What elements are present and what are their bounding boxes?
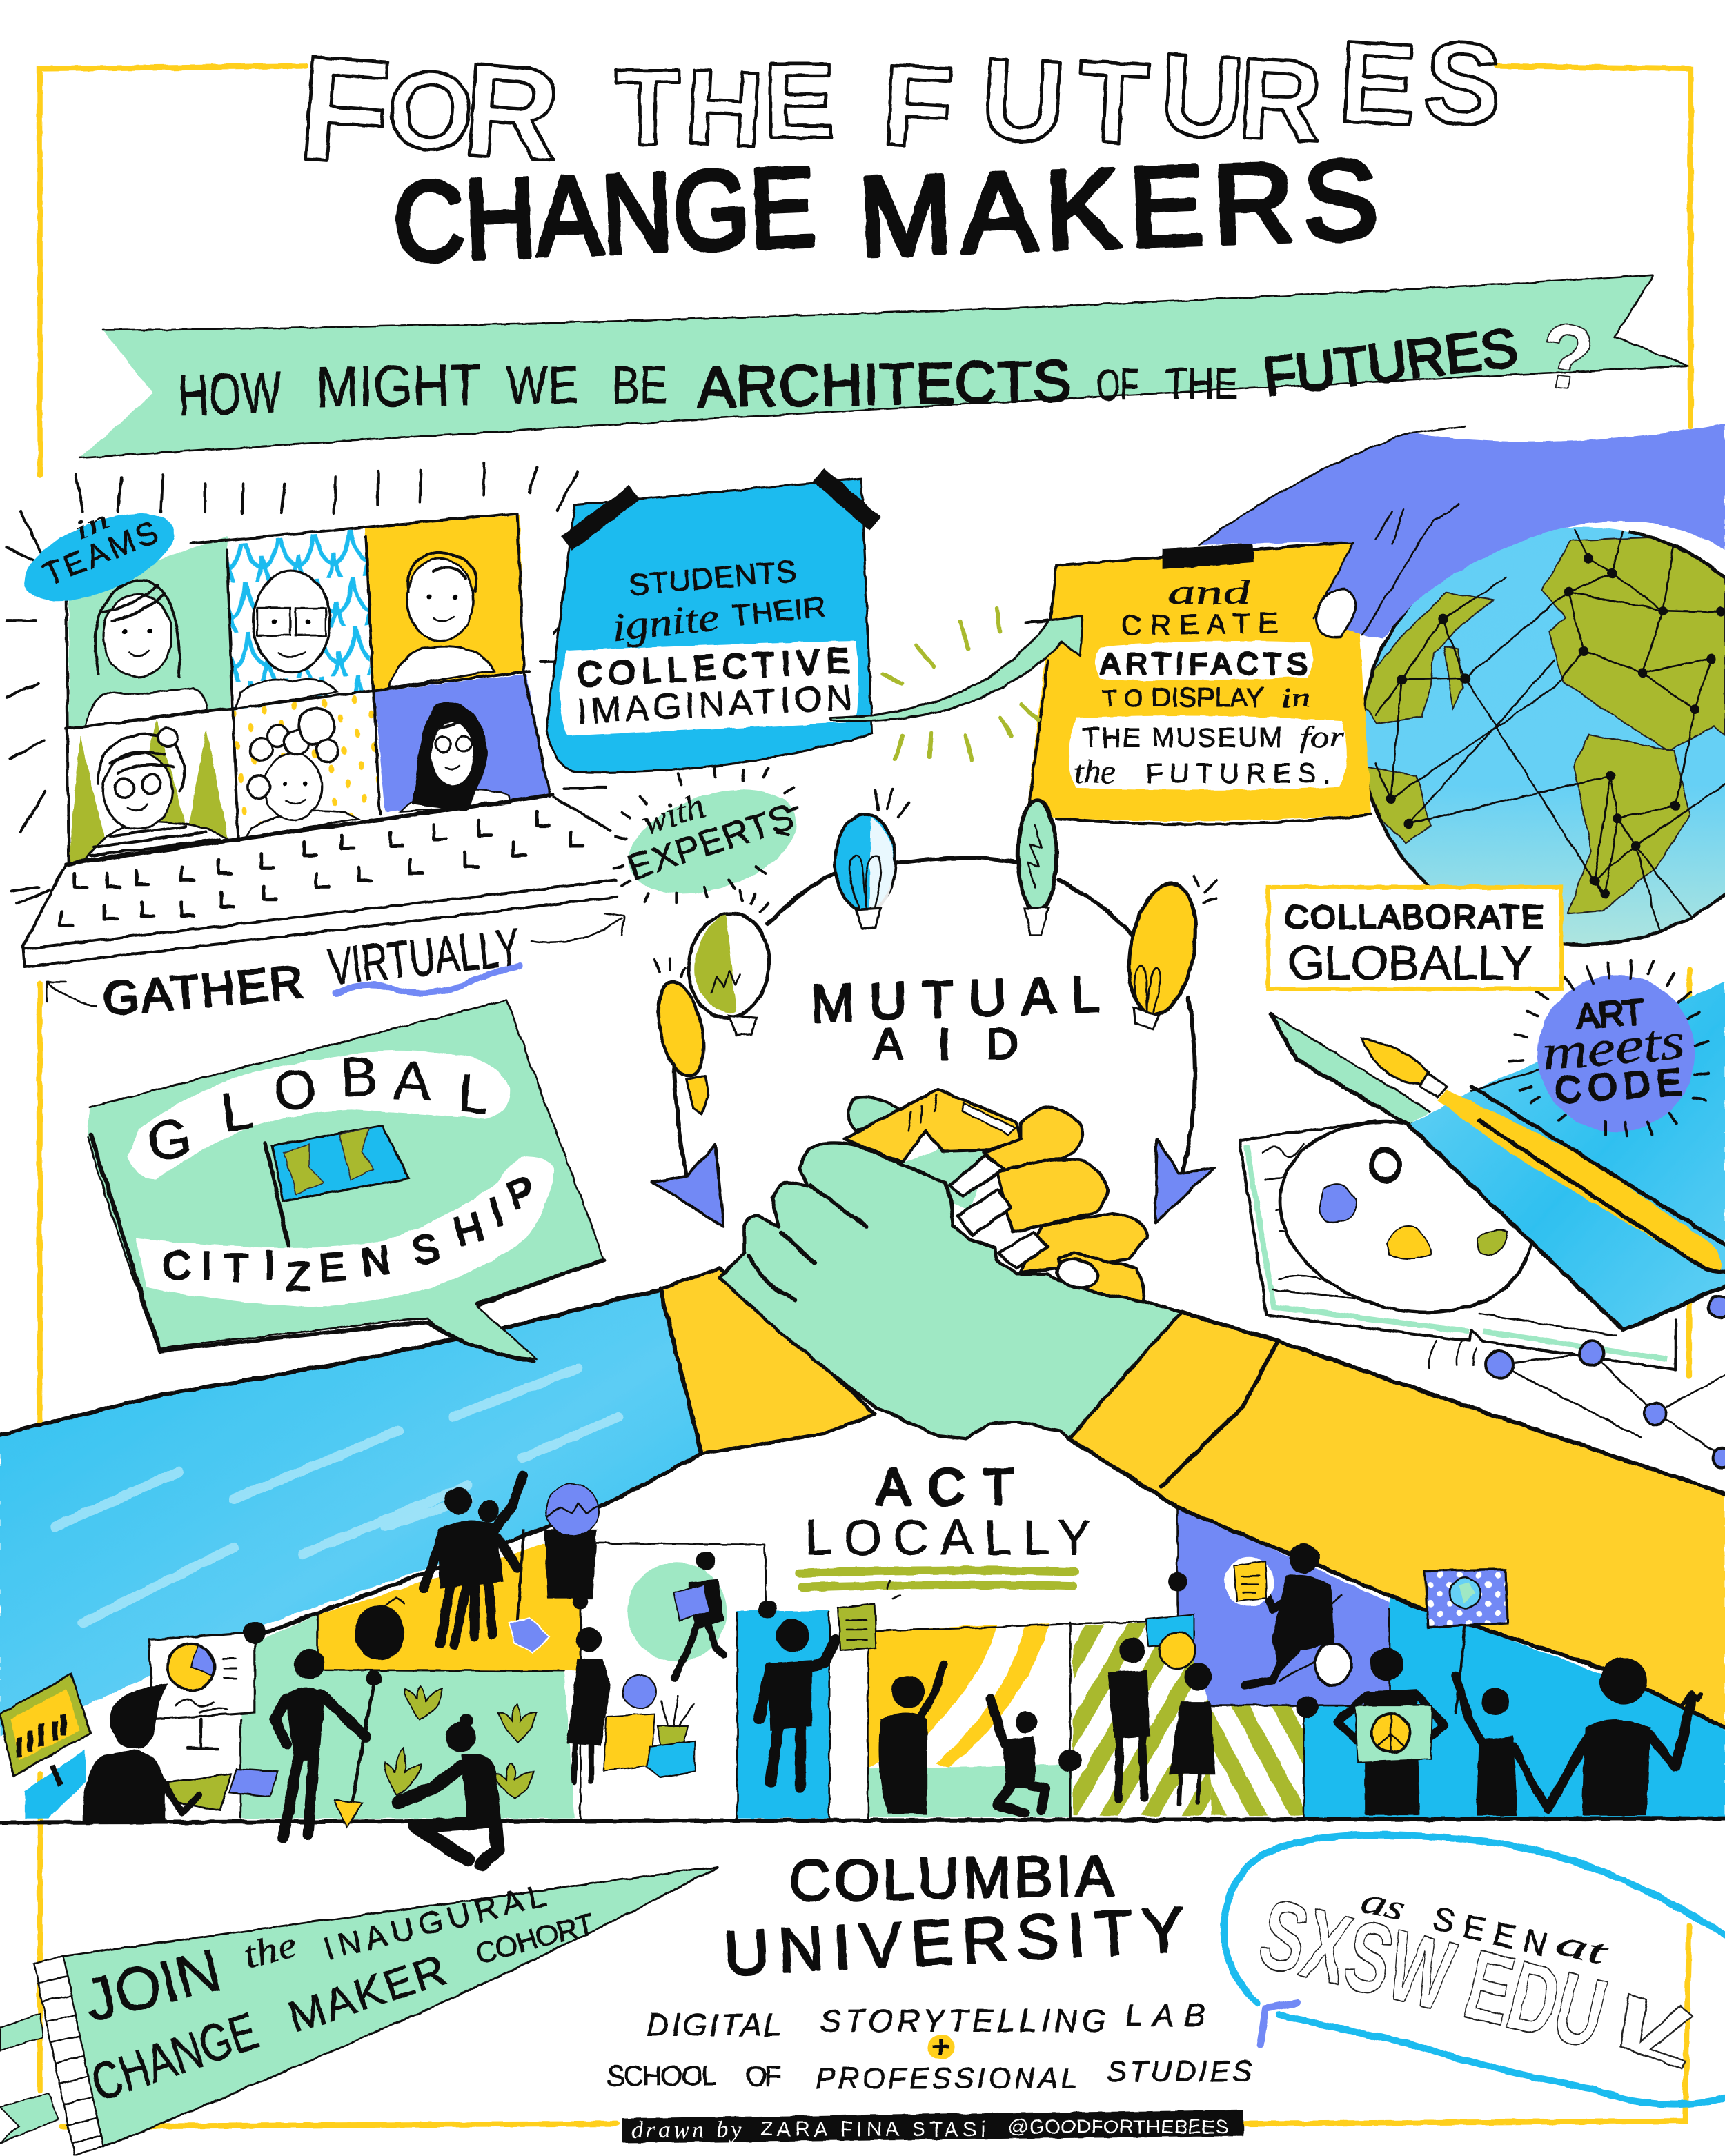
badge: art meets code: ART: [1574, 991, 1646, 1036]
document in spotlight: [1224, 1557, 1274, 1607]
title line 2: solid: MAKERS: [856, 136, 1380, 280]
artist credit bar: ZARA FINA STASi: [760, 2118, 985, 2141]
keyboard keys: [59, 811, 583, 926]
note text: THE MUSEUM: [1083, 723, 1282, 753]
columbia university credits: UNIVERSITY: [722, 1895, 1186, 1989]
note text: DISPLAY: [1152, 683, 1264, 713]
keyboard: [23, 795, 616, 967]
bulb: mint: [1018, 800, 1056, 936]
joint nodes: [244, 1572, 1318, 1772]
label: in teams: in: [69, 504, 114, 546]
mutual aid text: AID: [874, 1019, 1018, 1069]
highlighted text: COLLECTIVE: [576, 641, 850, 694]
cycle arc: [674, 858, 1195, 1175]
as seen at: at: [1552, 1921, 1613, 1974]
title: For the Futures Change Makers: [293, 17, 1505, 286]
bulb rays: [655, 789, 1216, 976]
mint hand: [720, 1143, 1182, 1438]
network lines: [1376, 530, 1725, 949]
citizenship text: CITIZENSHIP: [162, 1168, 541, 1299]
bulb: yellow small: [651, 978, 711, 1114]
columbia university credits: OF: [746, 2061, 781, 2091]
note text: [1069, 573, 1347, 790]
flag icon: [266, 1125, 408, 1246]
paint: yellow: [1387, 1227, 1431, 1258]
title line 1: outlined: F: [293, 24, 395, 196]
periwinkle squiggle: [335, 966, 520, 993]
pennant: join the inaugural cohort: [0, 1866, 718, 2155]
olive underline: [799, 1570, 1076, 1588]
mutual aid cycle: [651, 789, 1216, 1227]
broom: [509, 1530, 549, 1653]
runner with box: [674, 1552, 724, 1678]
left yellow sleeve: [660, 1268, 875, 1454]
pennant text: CHANGE: [83, 2001, 266, 2113]
globe with network: [1355, 527, 1725, 949]
mint finger behind: [849, 1097, 898, 1131]
banner question text: MIGHT: [315, 352, 482, 419]
note text: CREATE: [1121, 606, 1278, 642]
artist credit bar: [622, 2110, 1243, 2143]
label: gather virtually: [47, 913, 624, 1025]
highlighted text: [576, 641, 853, 731]
pennant text: the: [239, 1923, 300, 1977]
panel: blue presenter: [738, 1611, 829, 1819]
label: with experts: EXPERTS: [623, 796, 798, 887]
banner question text: THE: [1165, 359, 1238, 408]
video cell: mint: [69, 537, 231, 729]
blue loop: [1224, 1835, 1725, 2104]
panel: periwinkle wheelchair: [1178, 1506, 1390, 1705]
rays: [1510, 960, 1708, 1136]
pennant hatched strip: [34, 1956, 103, 2155]
man with peace sign: [1337, 1648, 1444, 1816]
flowers and bags: [604, 1675, 695, 1777]
label: gather virtually: GATHER: [101, 956, 306, 1025]
thick shadow edge: [91, 1135, 604, 1362]
flag sign on pole: [1425, 1570, 1508, 1714]
banner question text: HOW: [177, 359, 282, 428]
panel: mint circle for runner: [627, 1563, 727, 1661]
title line 1: outlined: FUTURES: [879, 17, 1505, 173]
label box: collaborate globally: COLLABORATE: [1285, 900, 1544, 936]
note intro text: THEIR: [731, 590, 827, 632]
columbia university credits: COLUMBIA: [789, 1843, 1114, 1913]
as seen at sxsw edu loop: [1224, 1835, 1725, 2104]
network nodes: [1391, 558, 1721, 894]
cuff seam against blue arm: [660, 1289, 702, 1454]
panel: yellow clean-up: [318, 1545, 580, 1671]
periwinkle arrowhead: [1260, 2003, 1297, 2046]
panel: blue marchers: [1304, 1596, 1725, 1819]
person 3: [389, 553, 494, 688]
pennant text: JOIN: [77, 1936, 228, 2035]
note text: ARTIFACTS: [1101, 647, 1307, 681]
pennant body: [63, 1866, 718, 2147]
columbia university credits: SCHOOL: [607, 2061, 717, 2091]
fingernail: [1317, 589, 1355, 637]
video call window: [66, 513, 550, 864]
arrow to experts: [531, 913, 624, 942]
note intro text: ignite: [610, 594, 721, 650]
label: in teams: [12, 495, 186, 619]
badge: art meets code: [1510, 960, 1708, 1136]
label: act locally: ACT: [876, 1458, 1014, 1516]
label: in teams: TEAMS: [37, 514, 163, 593]
person with raised hand: [878, 1664, 944, 1814]
banner question text: ?: [1536, 304, 1599, 410]
note text: FUTURES.: [1146, 758, 1330, 789]
label: act locally: LOCALLY: [805, 1510, 1091, 1565]
panel: blue wedge: [25, 1750, 86, 1819]
pennant text: COHORT: [472, 1908, 598, 1970]
chart board: [0, 1674, 91, 1786]
plants: [385, 1686, 537, 1799]
panel: mint garden: [241, 1615, 575, 1819]
label: act locally: [799, 1458, 1091, 1588]
video cell: blue scallops: [227, 528, 371, 710]
handshake hands: [660, 1089, 1182, 1454]
hand holding the note: [1199, 424, 1725, 640]
tape: [818, 475, 875, 524]
arrowhead left: [652, 1145, 724, 1227]
fountain pen: [1271, 1013, 1430, 1125]
booklet: [230, 1769, 278, 1797]
white highlight box: [560, 641, 858, 736]
banner question text: BE: [612, 356, 667, 415]
pennant tail bottom: [0, 2093, 58, 2143]
outline arrow: [1620, 1995, 1692, 2068]
speech signs: [1146, 1615, 1195, 1668]
columbia university credits: PROFESSIONAL: [816, 2061, 1077, 2094]
man waving: [1548, 1657, 1700, 1816]
woman holding sign: [1455, 1675, 1548, 1816]
yellow thumb: [845, 1089, 1021, 1163]
note intro text: [610, 554, 827, 650]
bubble outline: [88, 1000, 604, 1359]
title line 1: outlined: O: [384, 47, 477, 175]
banner question text: FUTURES: [1259, 316, 1521, 408]
columbia university credits: STORYTELLING: [820, 2003, 1106, 2039]
banner question text: WE: [506, 356, 578, 415]
as seen at: SEEN: [1429, 1900, 1551, 1964]
title line 1: outlined: H: [682, 46, 766, 170]
banner question text: OF: [1096, 360, 1139, 410]
person 6: [400, 702, 512, 811]
window frame lines: [66, 513, 550, 864]
bulb: yellow large: [1120, 878, 1205, 1029]
gardener with shovel: [275, 1649, 382, 1837]
banner question text: [180, 323, 1591, 415]
badge: art meets code: CODE: [1553, 1061, 1683, 1111]
title line 2: solid: CHANGE: [391, 143, 818, 286]
artist credit bar: drawn by: [631, 2117, 742, 2143]
label: with experts: [613, 767, 809, 913]
fingernails: [949, 1156, 1101, 1292]
title line 1: outlined: E: [763, 40, 835, 160]
pennant text: MAKER: [282, 1945, 452, 2042]
pennant text: INAUGURAL: [320, 1877, 549, 1967]
pennant tail top: [0, 2014, 43, 2050]
badge: art meets code: meets: [1539, 1012, 1687, 1081]
tape: [566, 493, 634, 543]
open book: [1239, 1117, 1675, 1370]
sleeve seam: [1161, 1341, 1278, 1487]
yellow arm (right): [1069, 1312, 1725, 1728]
video cell: periwinkle: [374, 674, 550, 811]
trash bag: [355, 1599, 404, 1660]
columbia university credits: [607, 1843, 1252, 2094]
video cell: yellow dots: [234, 692, 381, 839]
blue arm (left): [0, 1290, 702, 1736]
panel: olive stripes: [1073, 1620, 1304, 1816]
mutual aid text: [810, 965, 1101, 1069]
paint: olive: [1477, 1230, 1508, 1256]
video cell: yellow: [364, 515, 524, 692]
note text: and: [1168, 573, 1252, 611]
yellow fingers: [983, 1107, 1147, 1301]
arrowhead right: [1156, 1139, 1214, 1223]
monitor with pie chart: [148, 1632, 255, 1748]
rays: [613, 767, 798, 902]
title line 1: outlined: [293, 17, 1505, 196]
label: gather virtually: VIRTUALLY: [325, 918, 523, 996]
artist credit bar: @GOODFORTHEBEES: [1008, 2116, 1228, 2137]
paint palette, book and brush: [1239, 960, 1725, 1467]
man and woman talking: [1107, 1638, 1216, 1805]
person 1: [86, 580, 206, 726]
mint palm gap: [903, 1149, 990, 1210]
trash can: [544, 1484, 598, 1610]
paintbrush: [1362, 1038, 1725, 1272]
plus sign: [927, 2035, 955, 2059]
mutual aid text: MUTUAL: [810, 965, 1101, 1034]
bulb: olive: [684, 909, 774, 1036]
blue paper: [1408, 982, 1725, 1330]
title line 2: solid: [395, 157, 1377, 264]
label: with experts: with: [637, 787, 709, 842]
olive rays around arrow: [883, 608, 1038, 760]
person 2: [237, 571, 337, 709]
panel: yellow and mint curtain: [868, 1623, 1072, 1817]
note: create artifacts: [1027, 542, 1372, 824]
as seen at: as: [1357, 1880, 1409, 1929]
note text: for: [1300, 721, 1345, 754]
highlighted text: IMAGINATION: [576, 677, 853, 731]
two people waving: [424, 1476, 523, 1645]
ground line: [0, 1819, 1725, 1823]
kneeling gardener: [399, 1714, 502, 1863]
as seen at: [1357, 1880, 1613, 1974]
tape: [1163, 543, 1253, 569]
panel: monitor background white: [22, 1719, 241, 1819]
continents: [1355, 537, 1725, 913]
wire and panel outlines: [241, 1454, 1390, 1819]
network nodes: [1429, 1296, 1725, 1467]
note: students ignite collective imagination: [546, 475, 875, 772]
note text: the: [1074, 753, 1116, 790]
palette: [1259, 1095, 1553, 1339]
columbia university credits: STUDIES: [1107, 2055, 1252, 2087]
arrow to keyboard: [47, 982, 97, 1007]
arrow from note to artifacts: [831, 608, 1083, 760]
person 5: [245, 709, 357, 839]
columbia university credits: DIGITAL: [647, 2007, 781, 2043]
note text: TO: [1102, 685, 1143, 713]
act locally scene panels: [22, 1454, 1725, 1819]
presenter in blue panel: [758, 1601, 835, 1788]
sign held up: [838, 1581, 901, 1650]
columbia university credits: LAB: [1125, 1997, 1205, 2033]
global text: GLOBAL: [143, 1045, 491, 1174]
person 4: [86, 728, 228, 860]
woman standing: [566, 1627, 611, 1781]
bulb: blue: [835, 814, 896, 930]
label box: collaborate globally: GLOBALLY: [1288, 936, 1532, 989]
note intro text: STUDENTS: [628, 554, 798, 602]
paint: periwinkle: [1321, 1185, 1356, 1223]
label box: collaborate globally: [1268, 887, 1561, 989]
wheelchair user: [1245, 1543, 1351, 1685]
person at laptop: [83, 1683, 231, 1823]
banner question text: ARCHITECTS: [696, 348, 1072, 419]
speech bubble: global citizenship: [88, 1000, 604, 1362]
palette hole: [1372, 1150, 1399, 1180]
question banner ribbon: [80, 275, 1688, 458]
note text: in: [1281, 682, 1311, 713]
white highlight upper: [128, 1051, 511, 1179]
community people: [0, 1476, 1700, 1863]
title line 1: outlined: R: [459, 35, 564, 189]
rays around the window: [7, 462, 605, 904]
title line 1: outlined: T: [615, 47, 680, 167]
video cell: olive trees: [69, 710, 238, 864]
white highlight lower: [136, 1157, 554, 1307]
pennant text: [77, 1877, 598, 2113]
kneeling person: [990, 1699, 1045, 1813]
